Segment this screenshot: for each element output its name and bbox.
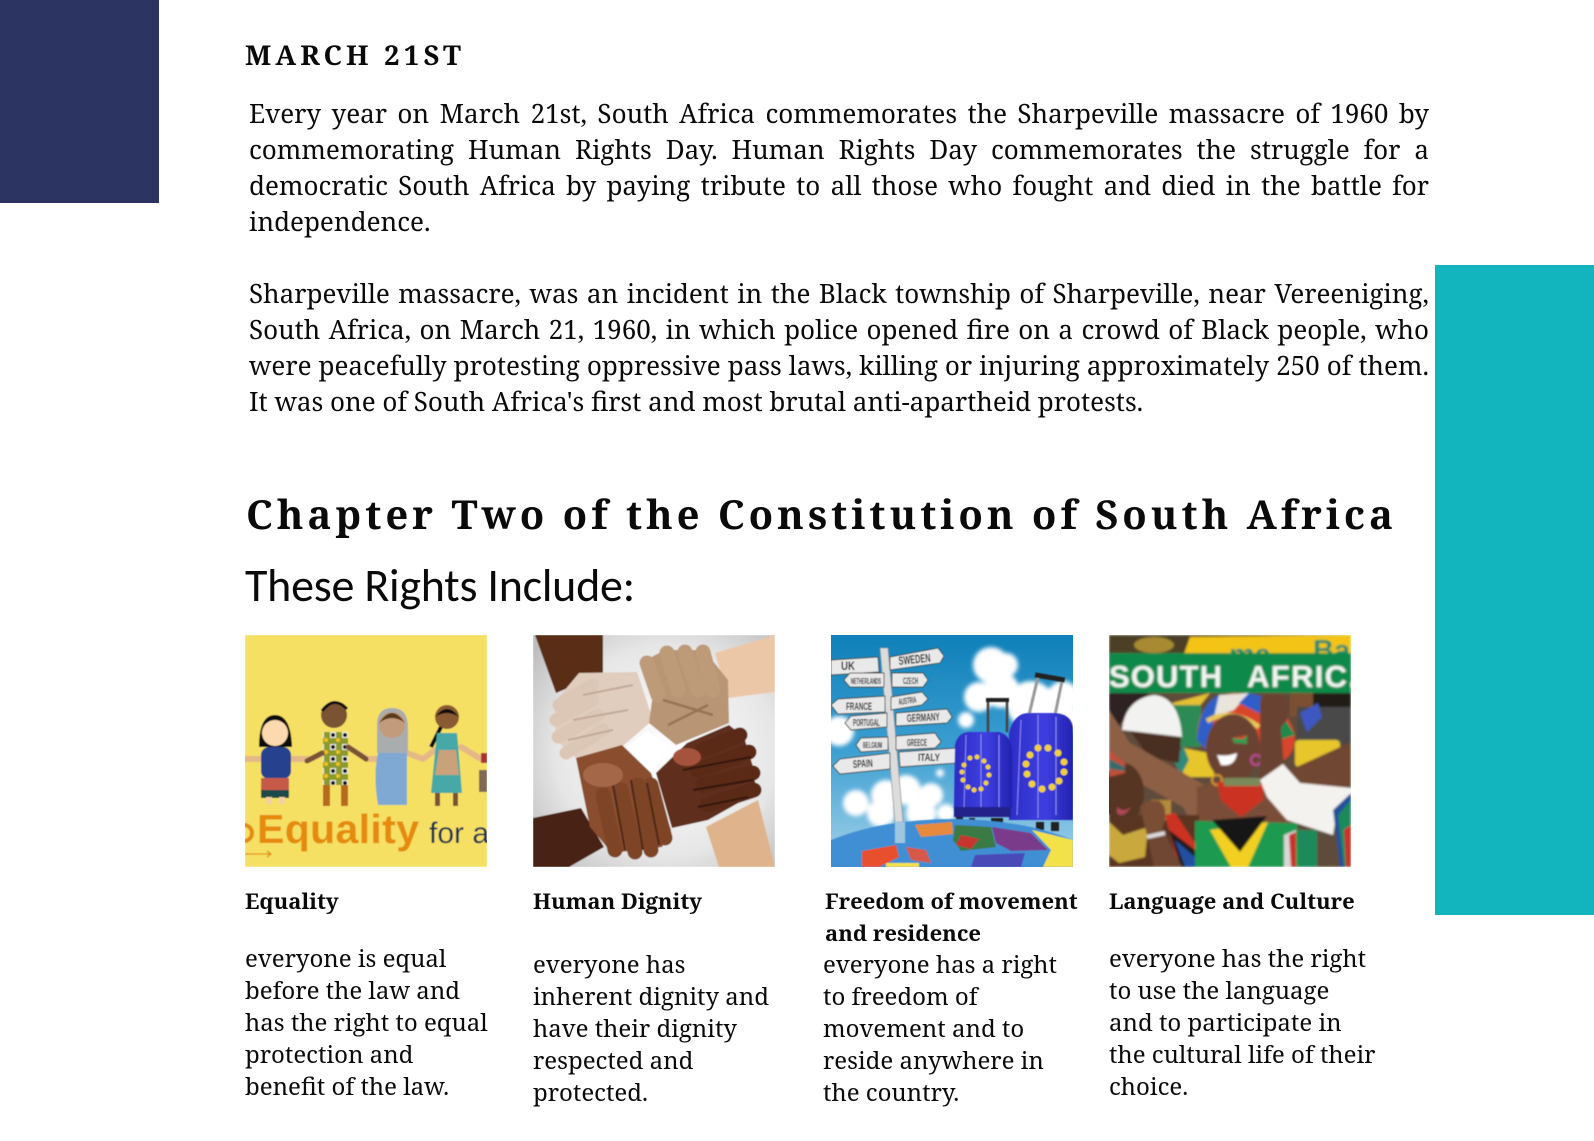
image: signpost and EU suitcases: NETHERLANDS bbox=[851, 677, 881, 686]
column: Language and Culture: to use the language bbox=[1109, 974, 1329, 1007]
image: signpost and EU suitcases bbox=[831, 635, 1073, 867]
image: signpost and EU suitcases: GERMANY bbox=[907, 711, 940, 725]
column: Human Dignity: have their dignity bbox=[533, 1012, 737, 1045]
column: Language and Culture: choice. bbox=[1109, 1070, 1188, 1103]
image: signpost and EU suitcases: AUSTRIA bbox=[898, 695, 917, 707]
column: Equality bbox=[245, 886, 488, 1103]
image: signpost and EU suitcases: UK bbox=[841, 659, 855, 673]
image: equality illustration: for a bbox=[429, 817, 489, 850]
column: Language and Culture bbox=[1109, 886, 1375, 1103]
column: Human Dignity bbox=[533, 886, 769, 1109]
column: Human Dignity: protected. bbox=[533, 1076, 648, 1109]
column: Human Dignity: respected and bbox=[533, 1044, 694, 1077]
heading: Chapter Two of the Constitution: Chapter Two of the Constitution of South Africa bbox=[246, 486, 1393, 541]
image: four interlocked hands bbox=[533, 635, 775, 867]
image: equality illustration: Equality bbox=[257, 806, 419, 852]
subheading: These Rights Include: These Rights Include: bbox=[245, 558, 635, 614]
column: Equality: before the law and bbox=[245, 974, 460, 1007]
heading: March 21st: MARCH 21ST bbox=[245, 37, 461, 74]
image: South African fans: AFRIC. bbox=[1247, 659, 1357, 694]
image: signpost and EU suitcases: CZECH bbox=[903, 676, 918, 686]
image: signpost and EU suitcases: BELGIUM bbox=[863, 741, 882, 750]
text block: Sharpeville massacre: Sharpeville massacre, was an incident in the Black township of Sharpeville, near Vereeniging, South Africa, on March 21, 1960, in which police opened fire on a crowd of Black people, who were peacefully protesting oppressive pass laws, killing or injuring approximately 250 of them. It was one of South Africa's first and most brutal anti-apartheid protests. bbox=[249, 275, 1429, 419]
image: South African fans: Ba bbox=[1313, 635, 1351, 667]
image: signpost and EU suitcases: ITALY bbox=[918, 752, 940, 764]
column: Human Dignity: inherent dignity and bbox=[533, 980, 769, 1013]
image: equality illustration bbox=[236, 635, 489, 867]
image: South African fans: ma bbox=[1229, 639, 1272, 671]
image: signpost and EU suitcases: SPAIN bbox=[852, 758, 873, 771]
column: Language and Culture: and to participate in bbox=[1109, 1006, 1342, 1039]
column: Human Dignity: everyone has bbox=[533, 948, 685, 981]
navy corner block bbox=[0, 0, 159, 203]
column: Equality: benefit of the law. bbox=[245, 1070, 449, 1103]
column: Freedom of movement: and residence bbox=[825, 918, 981, 948]
column: Freedom of movement: Freedom of movement bbox=[825, 886, 1078, 916]
teal side block bbox=[1435, 265, 1594, 915]
column: Freedom of movement bbox=[823, 886, 1078, 1109]
column: Freedom of movement: movement and to bbox=[823, 1012, 1024, 1045]
column: Freedom of movement: everyone has a right bbox=[823, 948, 1057, 981]
column: Equality: everyone is equal bbox=[245, 942, 447, 975]
column: Human Dignity: Human Dignity bbox=[533, 886, 702, 916]
image: South African fans: SOUTH bbox=[1109, 659, 1222, 694]
image: signpost and EU suitcases: SWEDEN bbox=[898, 651, 931, 668]
column: Language and Culture: the cultural life of their bbox=[1109, 1038, 1375, 1071]
column: Equality: has the right to equal bbox=[245, 1006, 488, 1039]
image: signpost and EU suitcases: PORTUGAL bbox=[853, 718, 880, 729]
text block: Human Rights Day intro: Every year on March 21st, South Africa commemorates the Sharpeville massacre of 1960 by commemorating Human Rights Day. Human Rights Day commemorates the struggle for a democratic South Africa by paying tribute to all those who fought and died in the battle for independence. bbox=[249, 95, 1429, 239]
column: Language and Culture: everyone has the right bbox=[1109, 942, 1366, 975]
column: Freedom of movement: the country. bbox=[823, 1076, 959, 1109]
column: Equality: protection and bbox=[245, 1038, 414, 1071]
image: signpost and EU suitcases: GREECE bbox=[907, 738, 927, 749]
column: Freedom of movement: reside anywhere in bbox=[823, 1044, 1044, 1077]
column: Freedom of movement: to freedom of bbox=[823, 980, 980, 1013]
column: Language and Culture: Language and Culture bbox=[1109, 886, 1355, 916]
column: Equality: Equality bbox=[245, 886, 339, 916]
image: signpost and EU suitcases: FRANCE bbox=[846, 701, 872, 713]
image: South African fans bbox=[1102, 635, 1357, 867]
